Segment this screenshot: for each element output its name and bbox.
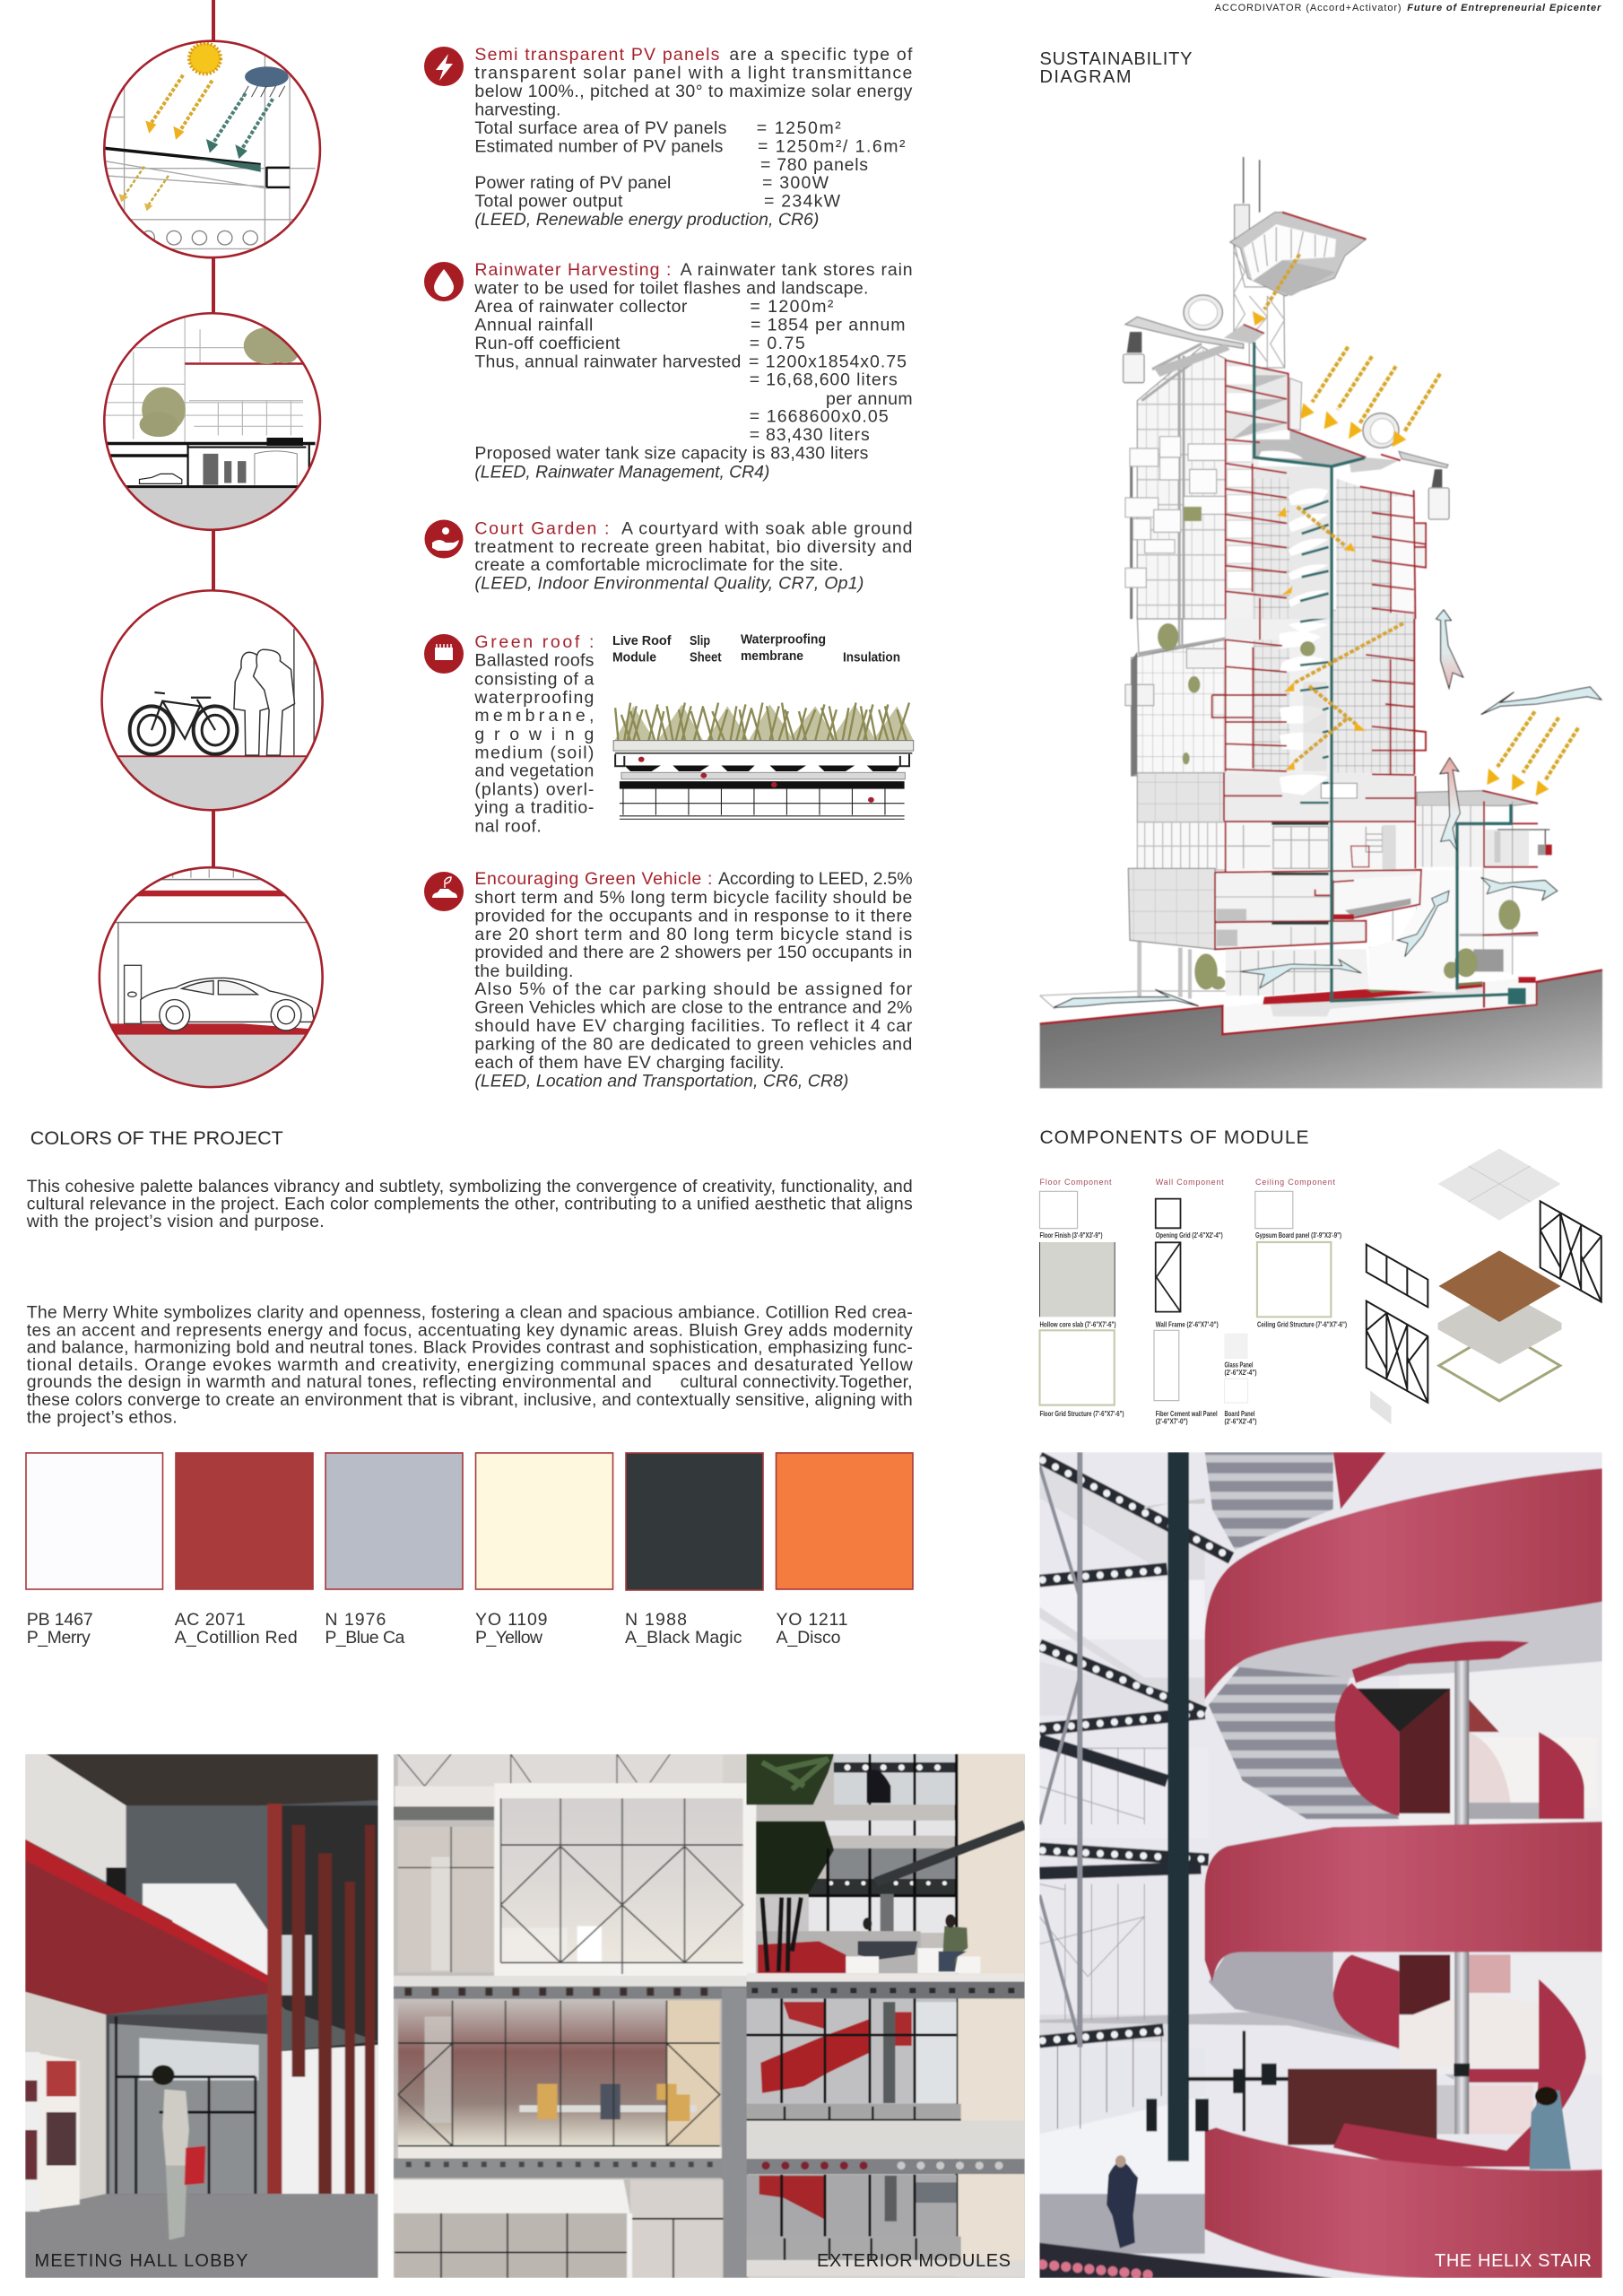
green roof layer labels: Insulation [843,651,900,665]
swatch: A_Black Magic: A_Black Magic [625,1628,742,1648]
photo: exterior modules, right bay [746,1745,1025,2279]
text block: court garden: Court Garden : [474,518,609,538]
arrows: daylight lower [1294,623,1578,780]
red floor outlines [1212,610,1538,949]
swatch: A_Cotillion Red: AC 2071 [175,1610,246,1630]
underside of upper band [1235,1602,1602,1678]
text block: encouraging green vehicle: Also 5% of the car parking should be assigned for [474,979,913,999]
header caption: ACCORDIVATOR (Accord+Activator) [1215,3,1402,13]
text block: encouraging green vehicle: should have EV charging facilities. To reflect it 4 car [474,1016,913,1036]
left and annex context [1040,870,1459,1009]
swatch: A_Cotillion Red [175,1453,313,1648]
central block floors [1226,359,1366,619]
green roof layer labels: Sheet [690,651,722,665]
text block: rainwater harvesting: (LEED, Rainwater Management, CR4) [474,463,769,483]
text block: palette intro: with the project’s vision and purpose. [26,1212,325,1231]
module component labels: Ceiling Grid Structure (7'-6"X7'-6") [1257,1320,1347,1329]
text block: rainwater harvesting: Proposed water tank size capacity is 83,430 liters [474,443,869,463]
teal service pipes [1271,610,1518,1001]
text block: palette meaning: tes an accent and represents energy and focus, accentuating key dynamic areas. Bluish Grey adds modernity [27,1320,913,1340]
text block: semi transparent PV panels: = 780 panels [760,155,868,175]
soil [613,741,914,751]
text block: encouraging green vehicle: are 20 short term and 80 long term bicycle stand is [474,925,913,944]
module component labels: Opening Grid (2'-6"X2'-4") [1156,1231,1223,1239]
green roof layer labels: Waterproofing [741,633,826,648]
plants [1158,623,1520,989]
text block: semi transparent PV panels [474,45,913,230]
text block: semi transparent PV panels: = 234kW [764,192,841,212]
swatch: A_Black Magic: N 1988 [625,1610,687,1630]
icon: bicycle [130,692,237,754]
module component swatches [1039,1191,1331,1405]
module component labels: (2'-6"X2'-4") [1225,1368,1257,1377]
text block: rainwater harvesting: Thus, annual rainwater harvested [474,352,741,371]
module component labels: Board Panel [1225,1409,1255,1418]
podium panel 1 [1137,773,1224,822]
text block: encouraging green vehicle: short term and 5% long term bicycle facility should be [474,888,912,908]
text block: rainwater harvesting: water to be used for toilet flashes and landscape. [473,279,868,299]
swatch: P_Blue Ca: P_Blue Ca [325,1628,405,1648]
header caption [1215,3,1601,13]
text block: semi transparent PV panels: harvesting. [474,100,560,119]
text block: palette meaning: The Merry White symbolizes clarity and openness, fostering a clean and spacious ambiance. Cotillion Red crea- [27,1303,913,1323]
red floor lines upper [1226,359,1426,619]
text block: semi transparent PV panels: Total surface area of PV panels [474,118,727,138]
projecting lower panel [1128,868,1215,949]
right room background [1469,1661,1602,1686]
annex [1369,791,1552,993]
text block: encouraging green vehicle: According to LEED, 2.5% [718,869,913,889]
basement [1222,977,1536,1034]
module component labels: Wall Frame (2'-6"X7'-0") [1156,1320,1219,1329]
text block: encouraging green vehicle: each of them have EV charging facility. [474,1053,784,1073]
swatch: A_Disco: YO 1211 [777,1610,848,1630]
text block: court garden: treatment to recreate green habitat, bio diversity and [474,537,912,557]
text block: rainwater harvesting: Rainwater Harvesting : [474,260,671,280]
text block: palette meaning: these colors converge to create an environment that is vibrant, inclusive, and contextually sensitive, aligning with [27,1390,913,1410]
swatch: P_Blue Ca: N 1976 [325,1610,386,1630]
heading: sustainability diagram: DIAGRAM [1040,67,1132,87]
text block: encouraging green vehicle: (LEED, Location and Transportation, CR6, CR8) [474,1072,848,1091]
text block: palette meaning: cultural connectivity.Together, [681,1372,913,1392]
stilts and lower glazing [1137,942,1369,1000]
module component labels: Floor Grid Structure (7'-6"X7'-6") [1040,1409,1124,1418]
waterproofing [620,781,905,789]
icon: lightning bolt [424,47,464,86]
people silhouettes [234,649,295,755]
text block: court garden: (LEED, Indoor Environmental Quality, CR7, Op1) [474,574,864,594]
icon: car [141,978,314,1031]
text block: rainwater harvesting: = 1854 per annum [751,315,906,335]
text block: encouraging green vehicle [474,869,913,1091]
chrome column [1454,1658,1469,2134]
module component labels: Floor Component [1040,1178,1112,1187]
text block: rainwater harvesting: = 16,68,600 liters [750,370,898,390]
module component labels: Floor Finish (3'-9"X3'-9") [1040,1231,1103,1239]
green roof section detail [613,703,914,819]
green roof layer labels: Module [612,651,656,665]
green roof layer labels: membrane [741,649,803,664]
module component labels: Hollow core slab (7'-6"X7'-6") [1040,1320,1116,1329]
text block: palette intro: This cohesive palette balances vibrancy and subtlety, symbolizing the convergence of creativity, functionality, and [27,1177,913,1196]
timeline connector [212,0,215,978]
sustainability diagram [1040,157,1602,1088]
drainage tray [615,753,912,779]
text block: court garden: A courtyard with soak able ground [621,518,913,538]
text block: encouraging green vehicle: the building. [474,961,573,981]
heading: components of module: COMPONENTS OF MODULE [1040,1127,1309,1148]
facade left [1132,344,1230,619]
vegetation [614,703,914,741]
swatch: P_Merry: PB 1467 [27,1610,93,1630]
text block: semi transparent PV panels: = 1250m² [757,118,841,138]
green roof layer labels: Live Roof [612,634,672,648]
exploded module axonometric [1367,1149,1601,1424]
charging post [125,965,142,1023]
teal tank [1508,988,1526,1004]
facade: upper left [1125,610,1226,776]
circle: PV panels section [104,41,320,257]
photo: meeting hall lobby [25,1754,378,2278]
beam row [394,1976,748,1987]
text block: palette intro: cultural relevance in the project. Each color complements the other, contributing to a unified aesthetic that aligns [27,1194,913,1213]
module component labels: Glass Panel [1225,1360,1254,1369]
icon: sun [189,43,221,74]
text block: palette meaning: grounds the design in warmth and natural tones, reflecting environmental and [27,1372,652,1392]
module component labels: Ceiling Component [1255,1178,1335,1187]
header caption: Future of Entrepreneurial Epicenter [1407,3,1601,13]
teal pipe upper [1254,343,1365,619]
circle: rainwater section [104,313,323,535]
text block: rainwater harvesting [473,260,913,483]
heading: sustainability diagram [1040,49,1193,87]
text block: green roof: consisting of a [474,669,595,689]
core lower glazing [1226,822,1415,871]
text block: court garden: create a comfortable microclimate for the site. [474,555,843,575]
text block: green roof: ying a traditio- [474,798,594,818]
heading: colors of the project: COLORS OF THE PROJECT [30,1127,283,1149]
floors and background [1040,1466,1205,1579]
text block: semi transparent PV panels: = 300W [762,173,829,193]
perforated beams [1039,1452,1235,2048]
text block: palette meaning: and balance, harmonizing bold and neutral tones. Black Provides contrast and sophistication, emphasizing func- [27,1337,913,1357]
circle: bicycle storage [97,590,327,815]
text block: green roof: nal roof. [474,816,542,836]
meeting room [398,2001,720,2147]
text block: rainwater harvesting: = 1200m² [750,297,834,317]
text block: green roof: Green roof : [474,632,594,652]
module box [494,1783,756,1977]
arrows: daylight upper [1264,254,1440,545]
icon: green roof [424,634,464,674]
swatch: P_Merry [26,1453,163,1648]
module component labels: (2'-6"X7'-0") [1156,1417,1188,1426]
text block: rainwater harvesting: A rainwater tank stores rain [681,260,913,280]
text block: palette meaning: the project’s ethos. [27,1407,178,1427]
text block: semi transparent PV panels: are a specific type of [729,45,913,65]
central core floors [1224,610,1415,822]
hall [1215,870,1421,949]
green roof layer labels: Slip [690,634,710,648]
text block: encouraging green vehicle: parking of the 80 are dedicated to green vehicles and [474,1034,912,1054]
text block: semi transparent PV panels: = 1250m²/ 1.6m² [758,136,906,156]
swatch: P_Blue Ca [325,1453,463,1648]
caption: the helix stair: THE HELIX STAIR [1435,2251,1592,2271]
swatch: A_Disco: A_Disco [777,1628,841,1648]
column and struts [1167,1452,1189,2161]
stair undersides [1205,1452,1333,1550]
text block: rainwater harvesting: Area of rainwater collector [474,297,688,317]
text block: green roof: and vegetation [474,761,594,781]
swatch: A_Black Magic [625,1453,763,1648]
swatch: A_Disco [777,1453,913,1648]
right wing floors [1336,478,1426,619]
green roof layer labels [612,633,900,665]
module component labels [1040,1178,1347,1426]
text block: encouraging green vehicle: provided for the occupants and in response to it there [474,907,912,926]
text block: rainwater harvesting: = 1200x1854x0.75 [749,352,907,371]
text block: green roof: waterproofing [473,688,594,708]
module component labels: Gypsum Board panel (3'-9"X3'-9") [1255,1231,1341,1239]
text block: court garden [474,518,913,594]
module component labels: Wall Component [1156,1178,1224,1187]
text block: green roof: Ballasted roofs [474,650,595,670]
icon: hand with plant [425,520,463,558]
mast and canopy [1230,157,1366,368]
text block: rainwater harvesting: = 83,430 liters [750,425,870,445]
icon: water drop [424,262,464,301]
red helix balustrades [1333,1452,1586,2167]
text block: semi transparent PV panels: (LEED, Renewable energy production, CR6) [474,210,819,230]
callout dots [638,757,874,803]
module component labels: Fiber Cement wall Panel [1156,1409,1218,1418]
icon: green vehicle [424,872,464,911]
swatch: A_Cotillion Red: A_Cotillion Red [175,1628,298,1648]
text block: rainwater harvesting: Annual rainfall [474,315,593,335]
circle: EV parking [97,867,327,1093]
people [1107,2162,1138,2248]
red slab detail [1333,914,1354,919]
swatch: P_Yellow: P_Yellow [475,1628,543,1648]
wheels and beams [1124,295,1449,519]
text block: semi transparent PV panels: Estimated number of PV panels [474,136,724,156]
caption: exterior modules: EXTERIOR MODULES [817,2251,1011,2271]
text block: rainwater harvesting: per annum [826,389,913,409]
swatch: P_Merry: P_Merry [27,1628,91,1648]
text block: encouraging green vehicle: Encouraging Green Vehicle : [474,869,712,889]
text block: semi transparent PV panels: transparent solar panel with a light transmittance [474,63,912,83]
text block: semi transparent PV panels: below 100%., pitched at 30° to maximize solar energy [474,82,913,101]
text block: green roof: medium (soil) [474,743,594,762]
text block: palette intro [26,1177,913,1231]
heading: sustainability diagram: SUSTAINABILITY [1040,49,1193,69]
text block: rainwater harvesting: = 1668600x0.05 [750,407,889,427]
text block: encouraging green vehicle: Green Vehicles which are close to the entrance and 2% [474,997,912,1017]
projecting white modules [1125,437,1226,587]
caption: meeting hall lobby: MEETING HALL LOBBY [34,2251,247,2271]
plant on facade [1184,507,1202,521]
swatch: P_Yellow: YO 1109 [475,1610,547,1630]
text block: green roof [473,632,595,836]
text block: rainwater harvesting: = 0.75 [750,334,805,353]
text block: semi transparent PV panels: Power rating of PV panel [474,173,671,193]
text block: semi transparent PV panels: Semi transparent PV panels [474,45,720,65]
text block: green roof: membrane, [474,706,594,726]
red helix bands [1205,1468,1602,1700]
text block: green roof: growing [474,725,594,744]
podium white frame [1137,822,1226,870]
text block: green roof: (plants) overl- [474,779,594,799]
text block: encouraging green vehicle: provided and there are 2 showers per 150 occupants in [474,943,912,962]
module component labels: (2'-6"X2'-4") [1225,1417,1257,1426]
text block: palette meaning: tional details. Orange evokes warmth and creativity, energizing communal spaces and desaturated Yellow [27,1355,914,1375]
ground [1040,970,1602,1088]
insulation [620,789,905,819]
building lower half [1040,610,1602,1088]
icon: rain cloud [242,66,289,97]
building upper half [1124,157,1449,619]
arrows: airflow [1054,610,1601,1007]
swatch: P_Yellow [475,1453,613,1648]
text block: rainwater harvesting: Run-off coefficient [474,334,621,353]
text block: palette meaning [27,1303,914,1427]
photo: exterior modules, left bay [394,1754,1025,2278]
photo: the helix stair [1039,1452,1602,2278]
arrows: sunlight and rain [125,75,273,204]
text block: semi transparent PV panels: Total power output [474,192,623,212]
